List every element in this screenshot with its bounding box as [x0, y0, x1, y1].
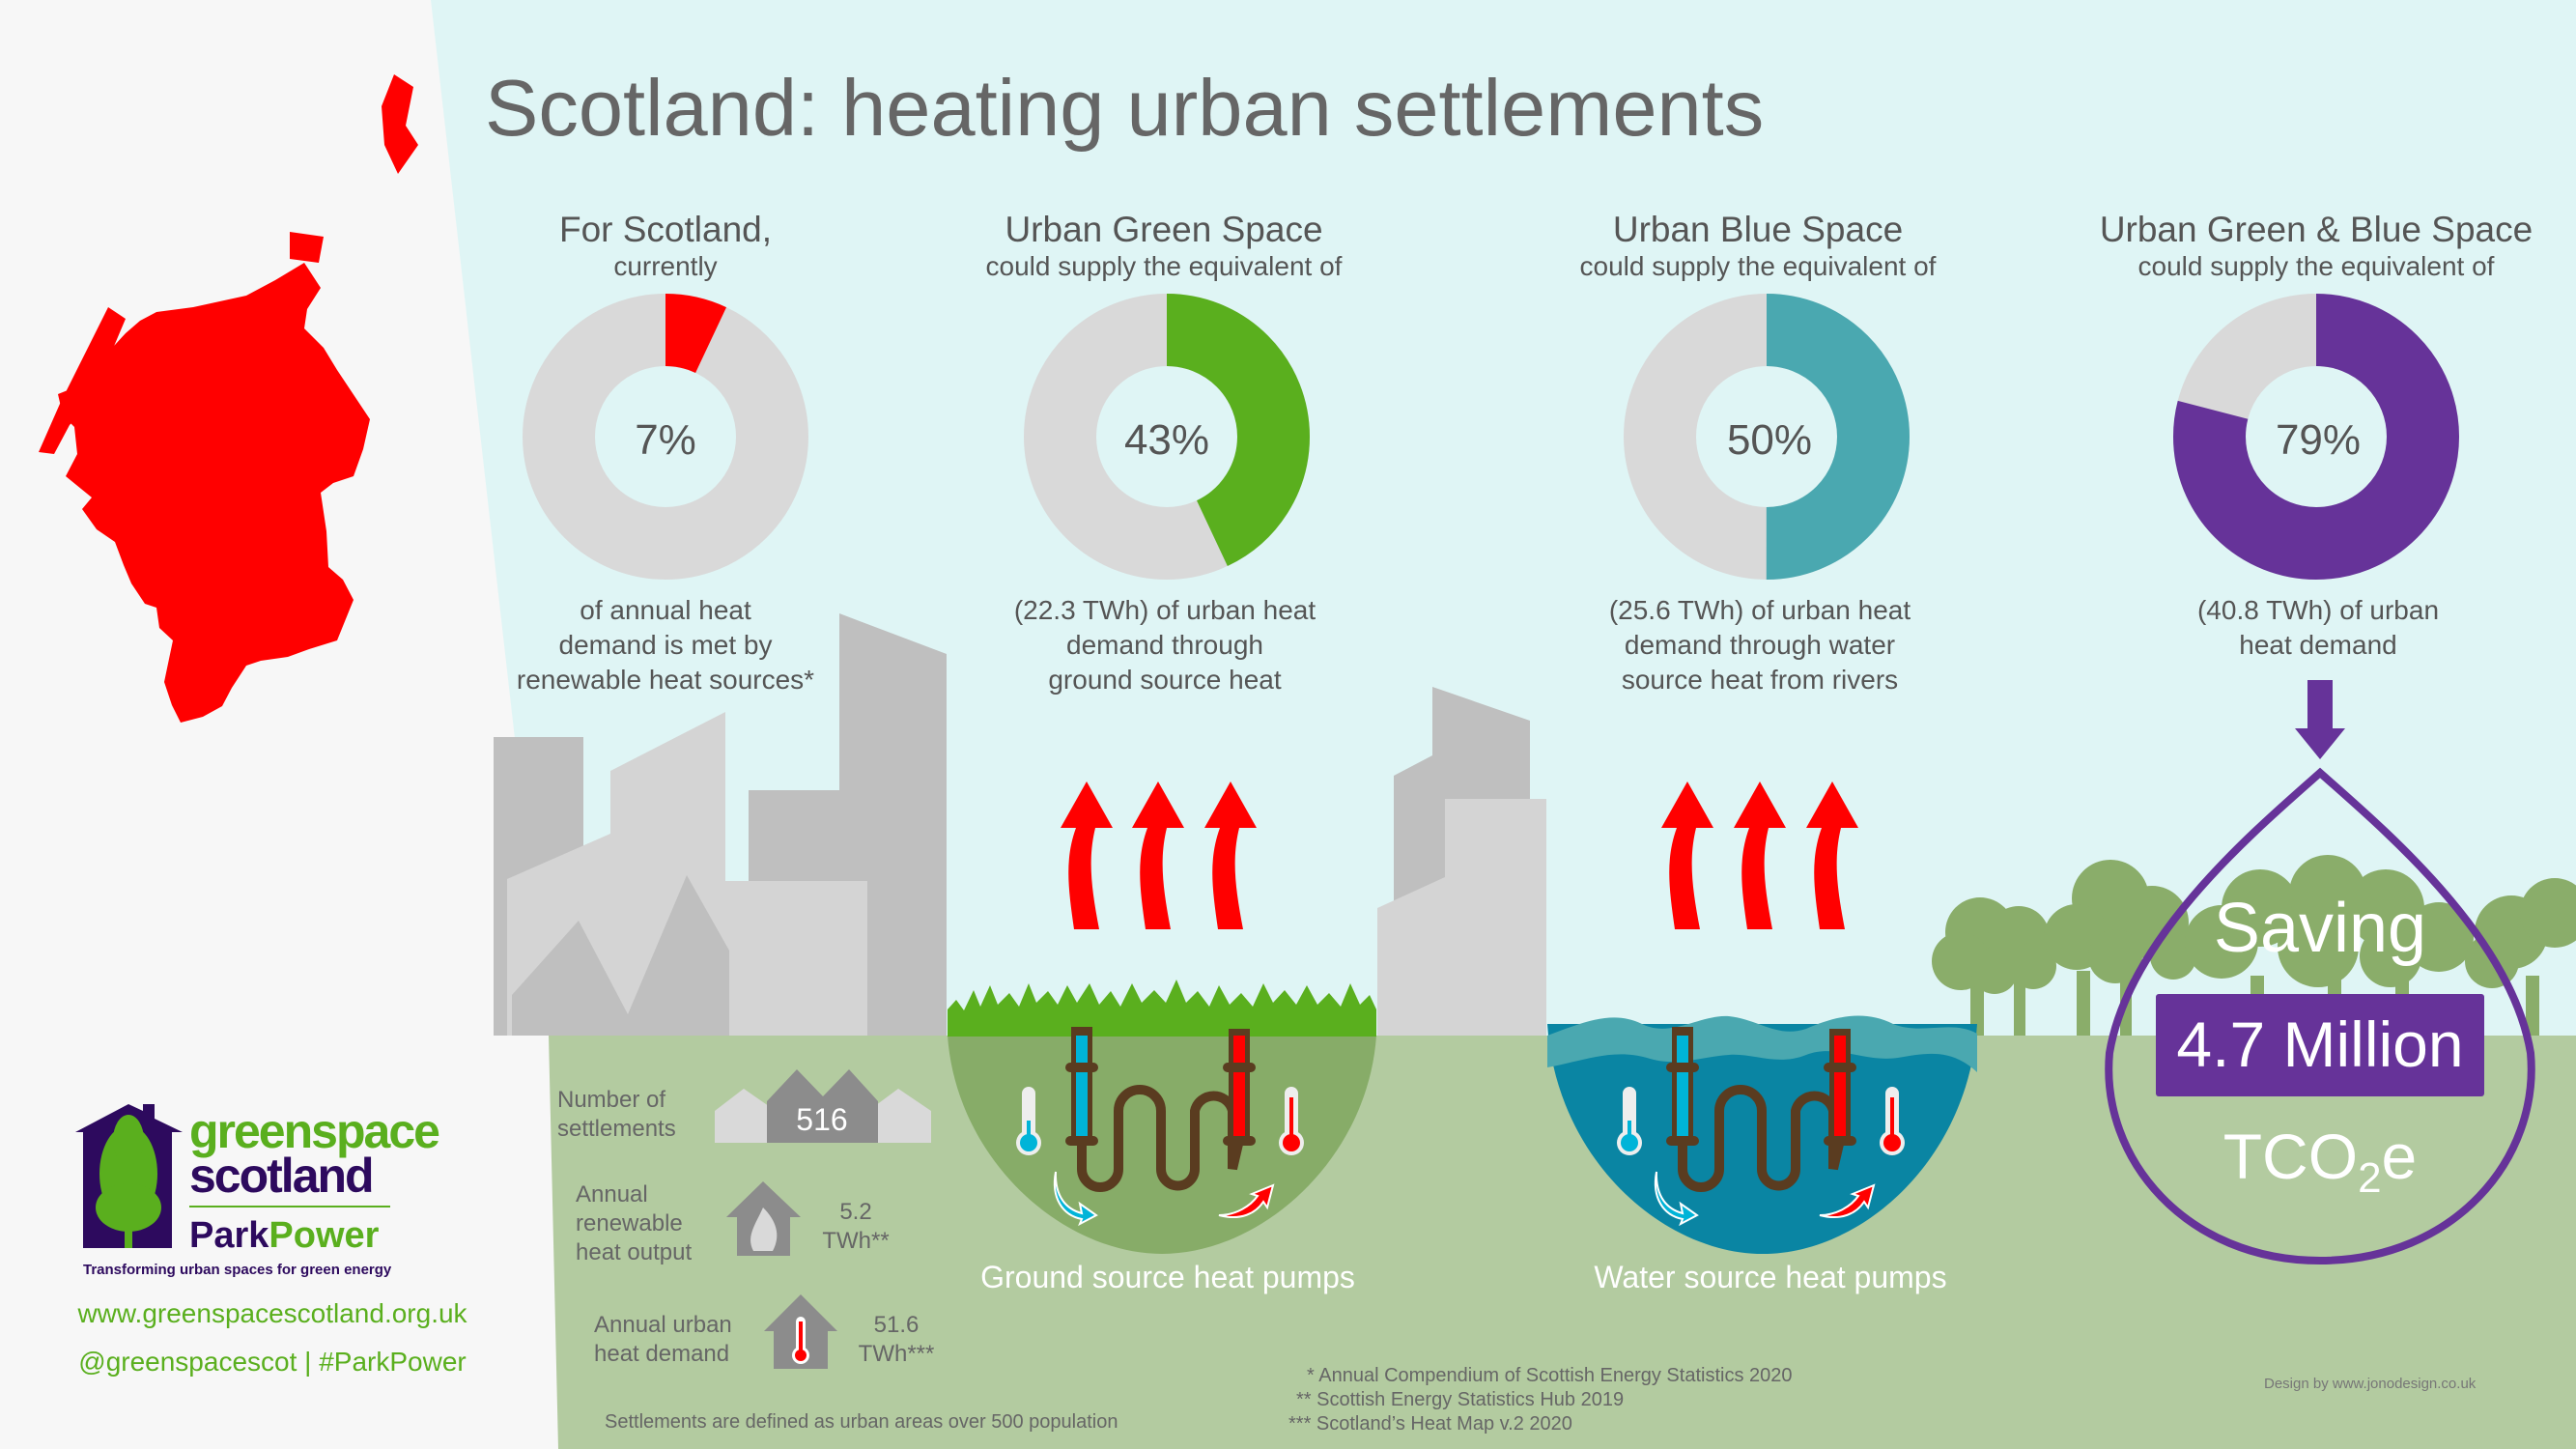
column 1: For Scotland [517, 210, 814, 695]
column 1: For Scotland: demand is met by [558, 630, 773, 660]
stat: heat demand [594, 1294, 934, 1369]
drop: saving: 2 [2358, 1154, 2382, 1202]
logo: ParkPower [189, 1215, 380, 1256]
buildings middle [1377, 687, 1546, 1036]
column 4: Urban Green & Blue Space: heat demand [2239, 630, 2397, 660]
column 2: Urban Green Space: ground source heat [1048, 665, 1282, 695]
stat: heat demand: heat demand [594, 1341, 729, 1367]
heat arrows water [1661, 781, 1858, 929]
column 1: For Scotland: For Scotland, [559, 210, 772, 249]
column 2: Urban Green Space [986, 210, 1343, 695]
stat: settlements [557, 1069, 931, 1143]
drop: saving: Saving [2214, 890, 2426, 967]
stat: heat demand: TWh*** [859, 1341, 934, 1367]
ground source pump [948, 980, 1376, 1294]
contact: @greenspacescot | #ParkPower [78, 1347, 467, 1377]
thermometer cold [1016, 1087, 1041, 1155]
sources: * Annual Compendium of Scottish Energy Statistics 2020 [1307, 1365, 1793, 1386]
column 3: Urban Blue Space: Urban Blue Space [1613, 210, 1903, 249]
water source pump: Water source heat pumps [1594, 1260, 1947, 1294]
thermometer hot [1279, 1087, 1304, 1155]
drop: saving: 4.7 Million [2176, 1009, 2464, 1080]
contact [76, 1298, 468, 1377]
column 3: Urban Blue Space: source heat from rivers [1622, 665, 1898, 695]
ground source pump: Ground source heat pumps [980, 1260, 1355, 1294]
logo: scotland [189, 1149, 373, 1203]
stat: renewable output [576, 1181, 890, 1265]
column 1: For Scotland: renewable heat sources* [517, 665, 814, 695]
footnote settlements: Settlements are defined as urban areas over 500 population [605, 1411, 1118, 1433]
flow arrows [1055, 1172, 1096, 1224]
title: Scotland: heating urban settlements [485, 63, 1764, 153]
column 1: For Scotland: 7% [635, 416, 696, 464]
grass [948, 980, 1376, 1037]
map of Scotland [39, 74, 418, 723]
column 3: Urban Blue Space [1580, 210, 1937, 695]
stat: renewable output: TWh** [822, 1228, 890, 1254]
stat: heat demand: 51.6 [874, 1312, 919, 1338]
column 1: For Scotland: currently [613, 251, 718, 281]
column 3: Urban Blue Space: (25.6 TWh) of urban heat [1609, 595, 1911, 625]
column 2: Urban Green Space: demand through [1066, 630, 1263, 660]
drop: saving: TCO [2223, 1121, 2358, 1192]
column 2: Urban Green Space: could supply the equivalent of [986, 251, 1343, 281]
purple arrow [2295, 680, 2345, 759]
column 3: Urban Blue Space: demand through water [1625, 630, 1895, 660]
logo [75, 1104, 439, 1278]
stat: settlements: 516 [796, 1102, 848, 1137]
stat: settlements: Number of [557, 1087, 665, 1113]
credit: Design by www.jonodesign.co.uk [2264, 1376, 2477, 1392]
column 2: Urban Green Space: 43% [1124, 416, 1209, 464]
column 2: Urban Green Space: (22.3 TWh) of urban heat [1014, 595, 1316, 625]
stat: heat demand: Annual urban [594, 1312, 732, 1338]
logo: greenspace [189, 1104, 439, 1158]
column 4: Urban Green & Blue Space [2100, 210, 2533, 660]
drop: saving: e [2382, 1121, 2417, 1192]
heat arrows ground [1061, 781, 1257, 929]
column 1: For Scotland: of annual heat [580, 595, 751, 625]
sources: ** Scottish Energy Statistics Hub 2019 [1296, 1389, 1624, 1410]
logo: Transforming urban spaces for green energy [83, 1262, 392, 1278]
stat: renewable output: renewable [576, 1210, 683, 1236]
column 3: Urban Blue Space: 50% [1727, 416, 1812, 464]
column 4: Urban Green & Blue Space: 79% [2276, 416, 2361, 464]
column 4: Urban Green & Blue Space: could supply the equivalent of [2138, 251, 2495, 281]
buildings left [494, 613, 947, 1036]
sources [1288, 1365, 1793, 1435]
water source pump [1547, 1016, 1977, 1294]
stat: renewable output: heat output [576, 1239, 692, 1265]
trees [1932, 855, 2576, 1036]
column 3: Urban Blue Space: could supply the equivalent of [1580, 251, 1937, 281]
column 2: Urban Green Space: Urban Green Space [1005, 210, 1323, 249]
drop: saving [2109, 773, 2532, 1261]
stat: renewable output: 5.2 [839, 1199, 872, 1225]
stat: renewable output: Annual [576, 1181, 648, 1208]
sources: *** Scotland’s Heat Map v.2 2020 [1288, 1413, 1572, 1435]
contact: www.greenspacescotland.org.uk [76, 1298, 468, 1328]
column 4: Urban Green & Blue Space: (40.8 TWh) of urban [2197, 595, 2439, 625]
column 4: Urban Green & Blue Space: Urban Green & Blue Space [2100, 210, 2533, 249]
stat: settlements: settlements [557, 1116, 676, 1142]
